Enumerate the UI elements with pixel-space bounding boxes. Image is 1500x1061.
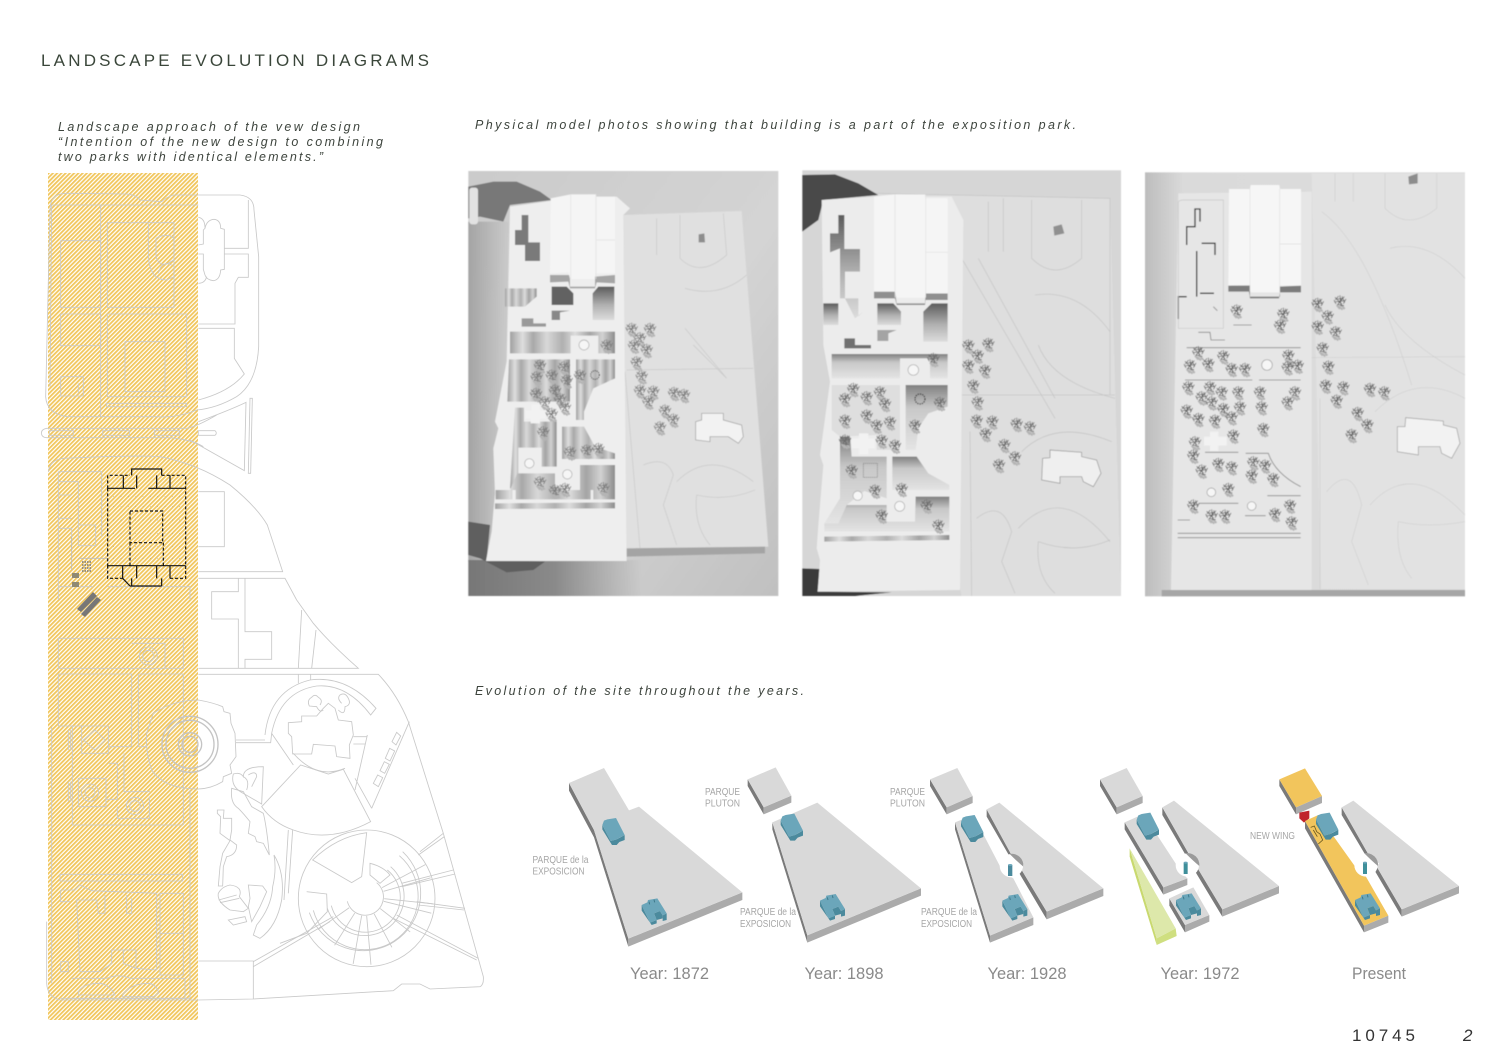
orange pluton block [1279, 768, 1322, 814]
model sheet [1171, 192, 1312, 590]
sheet cutouts [823, 215, 949, 542]
diagram: present [1279, 768, 1459, 932]
photo: physical model, hands holding sheet [468, 171, 778, 596]
hand top [468, 182, 552, 222]
sculpted round and cross elements [525, 404, 546, 423]
labels 1928 [890, 787, 977, 930]
text block: landscape approach: two parks with identical elements.” [58, 150, 324, 164]
parque pluton block [930, 768, 973, 814]
teal column [1363, 862, 1367, 874]
foam building volume [874, 292, 948, 305]
parque pluton block [748, 767, 791, 814]
label: year 1928: Year: 1928 [988, 965, 1066, 983]
circular notch [1176, 853, 1199, 877]
island block [1169, 887, 1209, 932]
model sheet [817, 197, 963, 592]
diagram: year 1928 [930, 768, 1103, 943]
footer: project number: 10745 [1352, 1026, 1415, 1045]
exposition park board [1312, 173, 1465, 589]
building foam on park [1397, 418, 1460, 458]
central strip [1125, 814, 1187, 895]
label: parque de la exposicion 1872: PARQUE de la [532, 855, 589, 866]
highlighted yellow hatch band [48, 173, 198, 1020]
red connector [1299, 811, 1309, 823]
labels 1928: PARQUE [890, 787, 925, 798]
text block: landscape approach: “Intention of the new design to combining [58, 135, 383, 149]
photo: physical model, second sheet stage [802, 170, 1121, 596]
model trees [839, 338, 1036, 534]
labels 1898 [705, 787, 796, 930]
labels 1898: PLUTON [705, 798, 740, 810]
hand bottom [468, 522, 545, 572]
caption: physical model photos: Physical model photos showing that building is a part of the exposition park. [475, 118, 1076, 132]
diagram: year 1898 [748, 767, 921, 943]
west strip [955, 815, 1033, 943]
circular notch [1354, 853, 1378, 877]
title: LANDSCAPE EVOLUTION DIAGRAMS [41, 51, 429, 70]
lake [233, 767, 263, 804]
exposition park board [875, 193, 1121, 596]
panel: site plan with highlighted band [41, 173, 483, 1020]
circular notch [1000, 854, 1023, 877]
green wedge [1130, 848, 1177, 945]
pluton block [1100, 768, 1143, 814]
label: present: Present [1352, 965, 1406, 983]
sculpted elements [1204, 432, 1227, 451]
label: year 1872: Year: 1872 [630, 965, 709, 983]
label: year 1898: Year: 1898 [804, 965, 884, 983]
footer: page number: 2 [1462, 1026, 1473, 1045]
model sheet [486, 197, 630, 561]
model trees [1181, 295, 1390, 530]
labels 1928: EXPOSICION [921, 919, 972, 930]
label: parque de la exposicion 1872: EXPOSICION [532, 866, 584, 878]
east strip [1342, 801, 1459, 917]
hand [802, 174, 878, 232]
black dashed building plan [108, 469, 186, 586]
diagram: year 1872 [569, 768, 742, 947]
labels 1898: PARQUE de la [740, 907, 796, 918]
labels 1928: PARQUE de la [921, 907, 977, 918]
east strip [987, 803, 1103, 919]
text block: landscape approach [58, 120, 383, 164]
labels 1898: EXPOSICION [740, 919, 791, 930]
labels 1928: PLUTON [890, 798, 925, 810]
foam building volume [550, 275, 615, 288]
labels 1898: PARQUE [705, 787, 740, 798]
park massing 1898 [772, 803, 921, 943]
foam building volume [1228, 286, 1301, 298]
text block: landscape approach: Landscape approach of the vew design [58, 120, 360, 134]
teal column [1008, 864, 1012, 876]
model trees [530, 323, 690, 499]
label: parque de la exposicion 1872 [532, 855, 589, 878]
orange central strip [1305, 815, 1388, 932]
site plan upper linework [41, 193, 297, 600]
caption: site evolution: Evolution of the site throughout the years. [475, 684, 804, 698]
sheet cutouts [495, 215, 615, 509]
small plan details: grey squares, stripes [72, 562, 101, 617]
building foam on park [1042, 450, 1101, 487]
cut lines [1178, 209, 1301, 538]
site plan lower linework [47, 600, 483, 1000]
building foam on park [696, 413, 743, 443]
photo: physical model, final stage [1145, 172, 1465, 596]
sculpted elements [852, 433, 875, 454]
label: new wing: NEW WING [1250, 831, 1295, 842]
label: year 1972: Year: 1972 [1160, 965, 1240, 983]
diagram: year 1972 [1100, 768, 1279, 945]
east strip [1162, 801, 1279, 917]
teal column [1184, 862, 1188, 874]
new wing plan linework [1311, 826, 1323, 844]
exposition park board [623, 211, 768, 557]
park massing 1872 [569, 768, 742, 947]
